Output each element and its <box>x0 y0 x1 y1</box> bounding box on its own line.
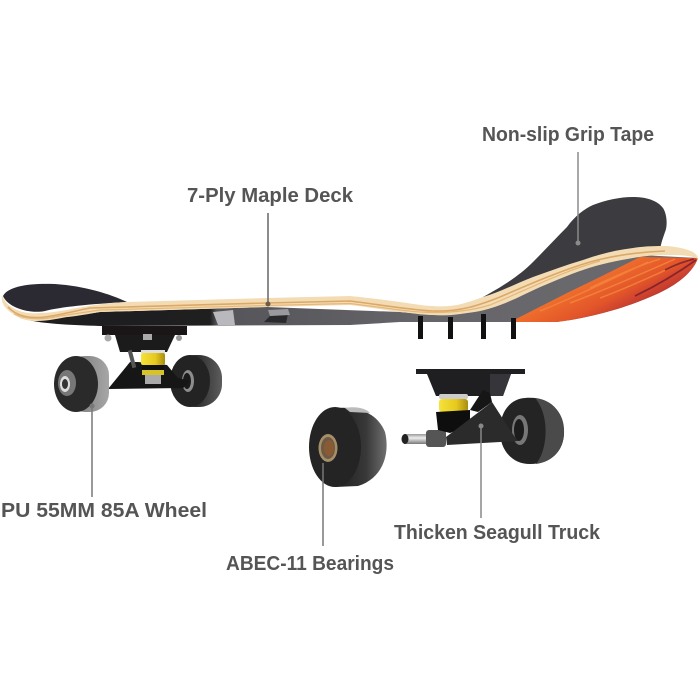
exploded wheel with bearing <box>309 407 387 487</box>
grip tape: nose <box>3 284 127 312</box>
callout: thicken seagull truck: Thicken Seagull Truck <box>394 522 601 544</box>
kingpin bushing <box>439 399 468 412</box>
yellow bushing <box>141 353 165 365</box>
callout: PU wheel <box>1 404 207 522</box>
front truck and wheels <box>54 326 222 412</box>
callout: non-slip grip tape: Non-slip Grip Tape <box>482 124 654 146</box>
callout: 7-ply maple deck <box>187 185 354 306</box>
baseplate <box>416 369 525 396</box>
deck underside graphic <box>20 255 698 326</box>
mounting hardware bolts <box>418 314 516 339</box>
callout: 7-ply maple deck: 7-Ply Maple Deck <box>187 185 354 207</box>
axle <box>404 434 434 444</box>
bearing <box>318 434 338 462</box>
wheel: truck <box>500 398 564 464</box>
exploded truck <box>402 369 564 464</box>
callout: PU wheel: PU 55MM 85A Wheel <box>1 500 207 522</box>
wheel: far <box>170 355 222 407</box>
grip tape: raised tail <box>483 197 667 300</box>
callout: non-slip grip tape <box>482 124 654 246</box>
callout: ABEC-11 bearings: ABEC-11 Bearings <box>226 553 394 575</box>
deck wood edge <box>2 246 698 321</box>
wheel: near <box>54 356 109 412</box>
callout: thicken seagull truck <box>394 424 601 544</box>
mounting plate and hanger <box>102 326 190 389</box>
hanger <box>446 402 518 445</box>
orange artwork <box>510 257 698 322</box>
